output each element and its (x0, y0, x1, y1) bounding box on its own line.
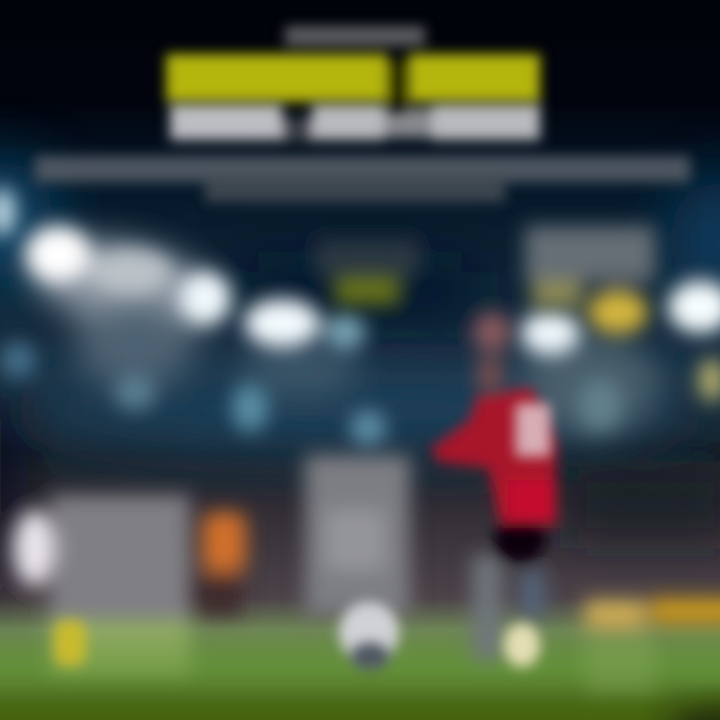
player shorts (494, 518, 546, 562)
white headline (170, 104, 540, 142)
yellow advertising boards (585, 598, 720, 630)
football (339, 602, 399, 670)
panel: centre column card (305, 455, 410, 615)
small kicker text bar (285, 26, 425, 46)
shirt number (516, 404, 550, 456)
blue glow on left and right edges (0, 160, 720, 450)
stadium floodlights (23, 224, 660, 435)
panel: right pitch card (585, 640, 655, 695)
dark vignette left of lower stands (0, 270, 720, 590)
panel: centre badge (315, 240, 420, 304)
pitch green (0, 650, 720, 720)
background player: white (13, 510, 57, 586)
background player: orange (198, 512, 246, 615)
panel: right badge (525, 226, 655, 334)
main player in red (430, 312, 556, 667)
player head (472, 312, 512, 392)
panel: lower left card (50, 495, 190, 675)
bottom corner darkening (665, 708, 720, 720)
yellow headline (166, 54, 540, 112)
yellow cone (54, 620, 86, 666)
player legs (472, 555, 545, 660)
subtitle lines (35, 156, 690, 202)
player boot (504, 623, 540, 667)
floodlight highlights (0, 188, 720, 446)
title panel: header block (35, 26, 690, 202)
player shirt (430, 388, 556, 525)
